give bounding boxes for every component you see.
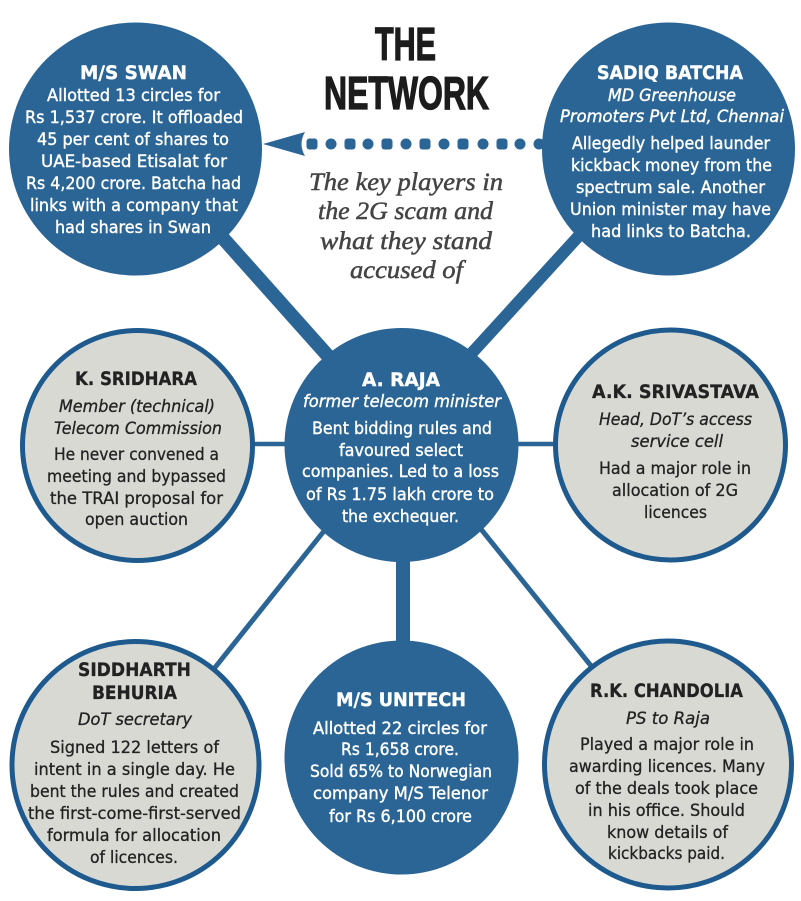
panel: M/S Swan <box>9 22 262 276</box>
panel: A.K. Srivastava <box>556 330 786 560</box>
panel: A.K. Srivastava: Head, DoT’s access <box>599 410 752 430</box>
panel: R.K. Chandolia: awarding licences. Many <box>569 757 765 777</box>
subtitle: the 2G scam and <box>318 198 494 225</box>
subtitle: what they stand <box>320 228 493 255</box>
dotted arrow <box>263 132 544 156</box>
panel: M/S Unitech: for Rs 6,100 crore <box>329 807 472 827</box>
panel: M/S Unitech: company M/S Telenor <box>313 784 488 804</box>
panel: Siddharth Behuria: formula for allocation <box>47 826 221 846</box>
panel: K. Sridhara <box>22 330 252 560</box>
subtitle: The key players in <box>309 169 503 196</box>
panel: M/S Unitech: Allotted 22 circles for <box>313 719 487 739</box>
title: THE <box>375 18 436 70</box>
panel: M/S Swan: Rs 1,537 crore. It offloaded <box>25 108 243 128</box>
panel: Siddharth Behuria: SIDDHARTH <box>78 659 191 681</box>
title <box>324 18 489 119</box>
panel: R.K. Chandolia: R.K. CHANDOLIA <box>590 680 743 702</box>
panel: M/S Swan: links with a company that <box>30 196 238 216</box>
panel: Siddharth Behuria: bent the rules and created <box>30 782 239 802</box>
panel: R.K. Chandolia: know details of <box>607 823 729 843</box>
panel: Sadiq Batcha <box>542 22 795 276</box>
panel: K. Sridhara: K. SRIDHARA <box>75 368 197 390</box>
panel: A. Raja: former telecom minister <box>303 392 502 412</box>
panel: A.K. Srivastava: allocation of 2G <box>612 481 738 501</box>
panel: Siddharth Behuria: DoT secretary <box>78 710 193 730</box>
panel: Sadiq Batcha: had links to Batcha. <box>591 222 751 242</box>
panel: M/S Unitech <box>284 640 518 874</box>
panel: R.K. Chandolia: PS to Raja <box>626 709 710 729</box>
panel: A. Raja <box>284 328 518 562</box>
panel: K. Sridhara: He never convened a <box>54 445 219 465</box>
panel: A.K. Srivastava: service cell <box>631 432 723 452</box>
title: NETWORK <box>324 67 489 119</box>
subtitle: accused of <box>350 257 466 284</box>
panel: A. Raja: favoured select <box>339 441 463 461</box>
panel: M/S Swan: Allotted 13 circles for <box>47 86 220 106</box>
panel: K. Sridhara: Telecom Commission <box>54 419 222 439</box>
panel: Siddharth Behuria: BEHURIA <box>92 682 177 704</box>
panel: M/S Unitech: M/S UNITECH <box>336 689 466 711</box>
subtitle <box>309 169 503 284</box>
panel: K. Sridhara: open auction <box>85 510 188 530</box>
panel: K. Sridhara: meeting and bypassed <box>47 467 226 487</box>
panel: R.K. Chandolia: of the deals took place <box>575 779 758 799</box>
panel: Sadiq Batcha: SADIQ BATCHA <box>597 62 743 84</box>
panel: Sadiq Batcha: spectrum sale. Another <box>576 178 765 198</box>
panel: M/S Swan: Rs 4,200 crore. Batcha had <box>26 174 241 194</box>
panel: Siddharth Behuria: the first-come-first-served <box>28 804 241 824</box>
panel: A. Raja: companies. Led to a loss <box>302 462 499 482</box>
panel: Sadiq Batcha: Union minister may have <box>570 200 771 220</box>
panel: M/S Unitech: Rs 1,658 crore. <box>341 740 459 760</box>
panel: Siddharth Behuria: intent in a single day. He <box>34 760 235 780</box>
panel: Sadiq Batcha: Promoters Pvt Ltd, Chennai <box>560 107 784 127</box>
connector lines <box>205 216 600 680</box>
panel: Sadiq Batcha: kickback money from the <box>571 156 772 176</box>
panel: M/S Unitech: Sold 65% to Norwegian <box>310 762 492 782</box>
panel: A. Raja: Bent bidding rules and <box>312 419 492 439</box>
panel: M/S Swan: M/S SWAN <box>80 62 187 84</box>
panel: Siddharth Behuria <box>12 642 259 888</box>
panel: Siddharth Behuria: Signed 122 letters of <box>50 738 220 758</box>
panel: A.K. Srivastava: A.K. SRIVASTAVA <box>592 381 759 403</box>
panel: Sadiq Batcha: MD Greenhouse <box>608 86 736 106</box>
panel: R.K. Chandolia: in his office. Should <box>588 801 745 821</box>
panel: R.K. Chandolia <box>544 641 792 888</box>
panel: A. Raja: A. RAJA <box>362 369 440 391</box>
panel: M/S Swan: UAE-based Etisalat for <box>41 152 227 172</box>
panel: K. Sridhara: the TRAI proposal for <box>50 489 223 509</box>
panel: A. Raja: the exchequer. <box>342 507 459 527</box>
panel: Sadiq Batcha: Allegedly helped launder <box>572 134 770 154</box>
panel: Siddharth Behuria: of licences. <box>90 848 178 868</box>
panel: A.K. Srivastava: licences <box>644 503 707 523</box>
panel: A.K. Srivastava: Had a major role in <box>599 459 751 479</box>
panel: M/S Swan: 45 per cent of shares to <box>37 130 229 150</box>
panel: K. Sridhara: Member (technical) <box>59 397 215 417</box>
panel: M/S Swan: had shares in Swan <box>55 218 211 238</box>
panel: R.K. Chandolia: kickbacks paid. <box>608 844 725 864</box>
panel: R.K. Chandolia: Played a major role in <box>580 735 754 755</box>
panel: A. Raja: of Rs 1.75 lakh crore to <box>306 485 494 505</box>
